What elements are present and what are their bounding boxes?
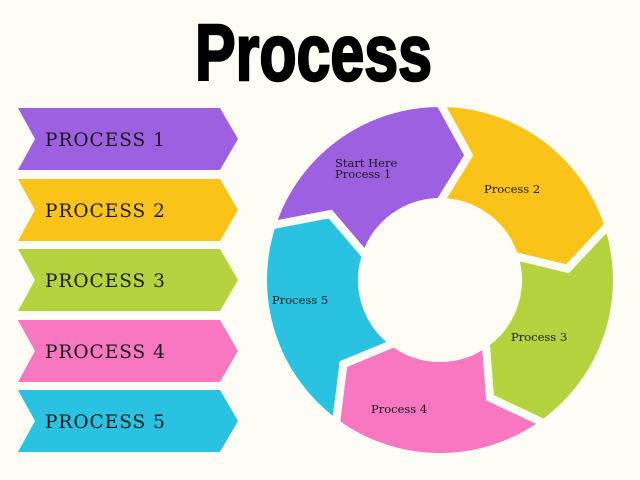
segment: process 4 bbox=[336, 343, 544, 457]
label: process 5: Process 5 bbox=[272, 293, 328, 307]
arrow: process 2 bbox=[18, 179, 238, 241]
label: process 2: Process 2 bbox=[484, 182, 540, 196]
segment: process 5 bbox=[263, 214, 394, 423]
arrow: process 4: PROCESS 4 bbox=[45, 342, 166, 363]
arrow: process 1 bbox=[18, 108, 238, 170]
arrow: process 1: PROCESS 1 bbox=[45, 130, 166, 151]
arrow: process 5: PROCESS 5 bbox=[45, 412, 166, 433]
arrow: process 4 bbox=[18, 320, 238, 382]
label: process 3: Process 3 bbox=[511, 330, 567, 344]
arrow: process 5 bbox=[18, 390, 238, 452]
label: start here process 1: Process 1 bbox=[335, 167, 391, 181]
ring labels bbox=[272, 156, 567, 416]
panel: left process list bbox=[18, 108, 238, 452]
label: start here process 1: Start Here bbox=[335, 156, 397, 170]
segment: process 1 bbox=[272, 103, 469, 256]
segment: process 3 bbox=[486, 225, 617, 423]
chart: process cycle ring bbox=[263, 103, 617, 457]
arrow: process 3: PROCESS 3 bbox=[45, 271, 166, 292]
title: Process bbox=[195, 8, 432, 97]
arrow: process 2: PROCESS 2 bbox=[45, 201, 166, 222]
arrow: process 3 bbox=[18, 249, 238, 311]
segment: process 2 bbox=[440, 103, 608, 269]
label: process 4: Process 4 bbox=[371, 402, 427, 416]
